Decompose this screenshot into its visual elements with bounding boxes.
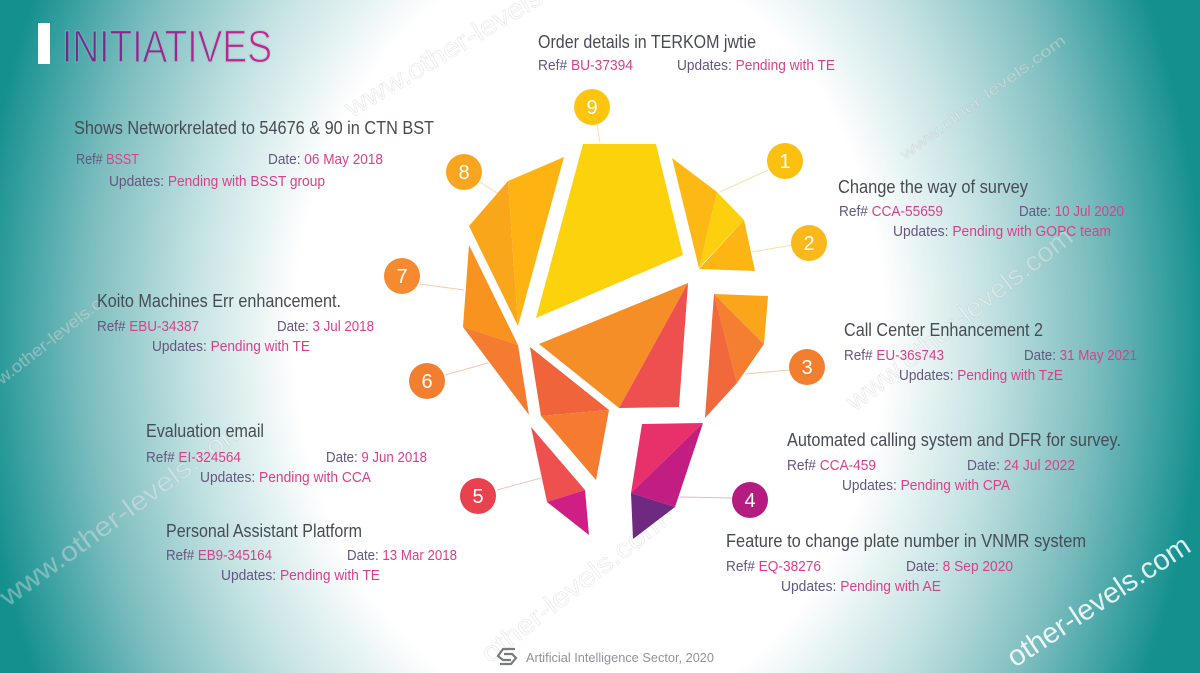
segment 4 <box>631 423 703 539</box>
marker 3 <box>789 349 825 385</box>
initiative 8 text: Ref# BSST <box>76 152 139 168</box>
marker 7 <box>384 258 420 294</box>
initiative 8 text: Updates: Pending with BSST group <box>109 174 325 190</box>
segment 2 <box>699 220 755 271</box>
initiative 4a text: Updates: Pending with CPA <box>842 478 1010 494</box>
initiative 6 text: Evaluation email <box>146 421 264 441</box>
marker 3: 3 <box>801 357 813 379</box>
initiative 3 text: Updates: Pending with TzE <box>899 368 1063 384</box>
polygon head graphic <box>463 144 768 539</box>
initiative 4b text: Ref# EQ-38276 <box>726 559 821 575</box>
marker 1 <box>767 143 803 179</box>
watermarks: www.other-levels.com <box>0 414 251 613</box>
marker 2 <box>791 225 827 261</box>
initiative 4a text <box>787 430 1121 494</box>
marker 6 <box>409 363 445 399</box>
center segment <box>539 283 688 408</box>
initiative 7 text: Date: 3 Jul 2018 <box>277 319 374 335</box>
initiative 5 text: Date: 13 Mar 2018 <box>347 548 457 564</box>
marker 1: 1 <box>779 151 791 173</box>
title: INITIATIVES <box>62 21 272 72</box>
initiative 4b text: Updates: Pending with AE <box>781 579 941 595</box>
initiative 7 text: Updates: Pending with TE <box>152 339 310 355</box>
marker 7: 7 <box>396 266 408 288</box>
watermarks: www.other-levels.com <box>839 221 1079 417</box>
marker 8: 8 <box>458 162 470 184</box>
title accent bar <box>38 23 50 64</box>
marker 5: 5 <box>472 486 484 508</box>
segment 6 <box>463 327 529 415</box>
initiative 7 text <box>97 291 374 355</box>
marker 9: 9 <box>586 97 598 119</box>
initiative 7 text: Ref# EBU-34387 <box>97 319 199 335</box>
initiative 3 text: Ref# EU-36s743 <box>844 348 944 364</box>
initiative 1 and 2 text: Change the way of survey <box>838 177 1028 197</box>
initiative 1 and 2 text <box>838 177 1124 240</box>
marker 2: 2 <box>803 233 815 255</box>
initiative 4b text: Date: 8 Sep 2020 <box>906 559 1013 575</box>
marker 9 <box>574 89 610 125</box>
segment 9 <box>536 144 683 318</box>
watermarks: other-levels.com <box>1001 530 1196 673</box>
segment 5 <box>531 427 589 535</box>
initiative 1 and 2 text: Ref# CCA-55659 <box>839 204 943 220</box>
marker 6: 6 <box>421 371 433 393</box>
footer logo <box>498 649 516 664</box>
initiative 3 text <box>844 320 1137 384</box>
initiative 8 text <box>74 118 434 190</box>
lower center segment <box>530 347 609 480</box>
marker 5 <box>460 478 496 514</box>
initiative 9 text <box>538 32 835 74</box>
initiative 8 text: Shows Networkrelated to 54676 & 90 in CTN BST <box>74 118 434 138</box>
initiative 9 text: Updates: Pending with TE <box>677 58 835 74</box>
initiative 4b text <box>726 531 1086 595</box>
initiative 4b text: Feature to change plate number in VNMR system <box>726 531 1086 551</box>
segment 7 <box>463 245 518 345</box>
initiative 3 text: Call Center Enhancement 2 <box>844 320 1043 340</box>
watermarks: www.other-levels.com <box>896 32 1069 164</box>
initiative 6 text: Date: 9 Jun 2018 <box>326 450 427 466</box>
footer text: Artificial Intelligence Sector, 2020 <box>526 651 714 665</box>
initiative 5 text: Personal Assistant Platform <box>166 521 362 541</box>
initiative 4a text: Date: 24 Jul 2022 <box>967 458 1075 474</box>
marker 4: 4 <box>744 490 756 512</box>
initiative 8 text: Date: 06 May 2018 <box>268 152 383 168</box>
initiative 9 text: Order details in TERKOM jwtie <box>538 32 756 52</box>
initiative 1 and 2 text: Date: 10 Jul 2020 <box>1019 204 1124 220</box>
initiative 9 text: Ref# BU-37394 <box>538 58 633 74</box>
initiative 5 text: Updates: Pending with TE <box>221 568 380 584</box>
segment 1 <box>672 158 744 268</box>
initiative 3 text: Date: 31 May 2021 <box>1024 348 1137 364</box>
initiative 5 text: Ref# EB9-345164 <box>166 548 272 564</box>
segment 8 <box>469 157 564 326</box>
marker 8 <box>446 154 482 190</box>
initiative 6 text <box>146 421 427 486</box>
initiative 5 text <box>166 521 457 584</box>
connector lines <box>420 124 792 498</box>
initiative 7 text: Koito Machines Err enhancement. <box>97 291 341 311</box>
segment 3 <box>705 294 768 418</box>
initiative 6 text: Ref# EI-324564 <box>146 450 241 466</box>
initiative 6 text: Updates: Pending with CCA <box>200 470 371 486</box>
initiative 1 and 2 text: Updates: Pending with GOPC team <box>893 224 1111 240</box>
initiative 4a text: Ref# CCA-459 <box>787 458 876 474</box>
initiative 4a text: Automated calling system and DFR for survey. <box>787 430 1121 450</box>
marker 4 <box>732 482 768 518</box>
watermarks: other-levels.com <box>475 506 672 669</box>
